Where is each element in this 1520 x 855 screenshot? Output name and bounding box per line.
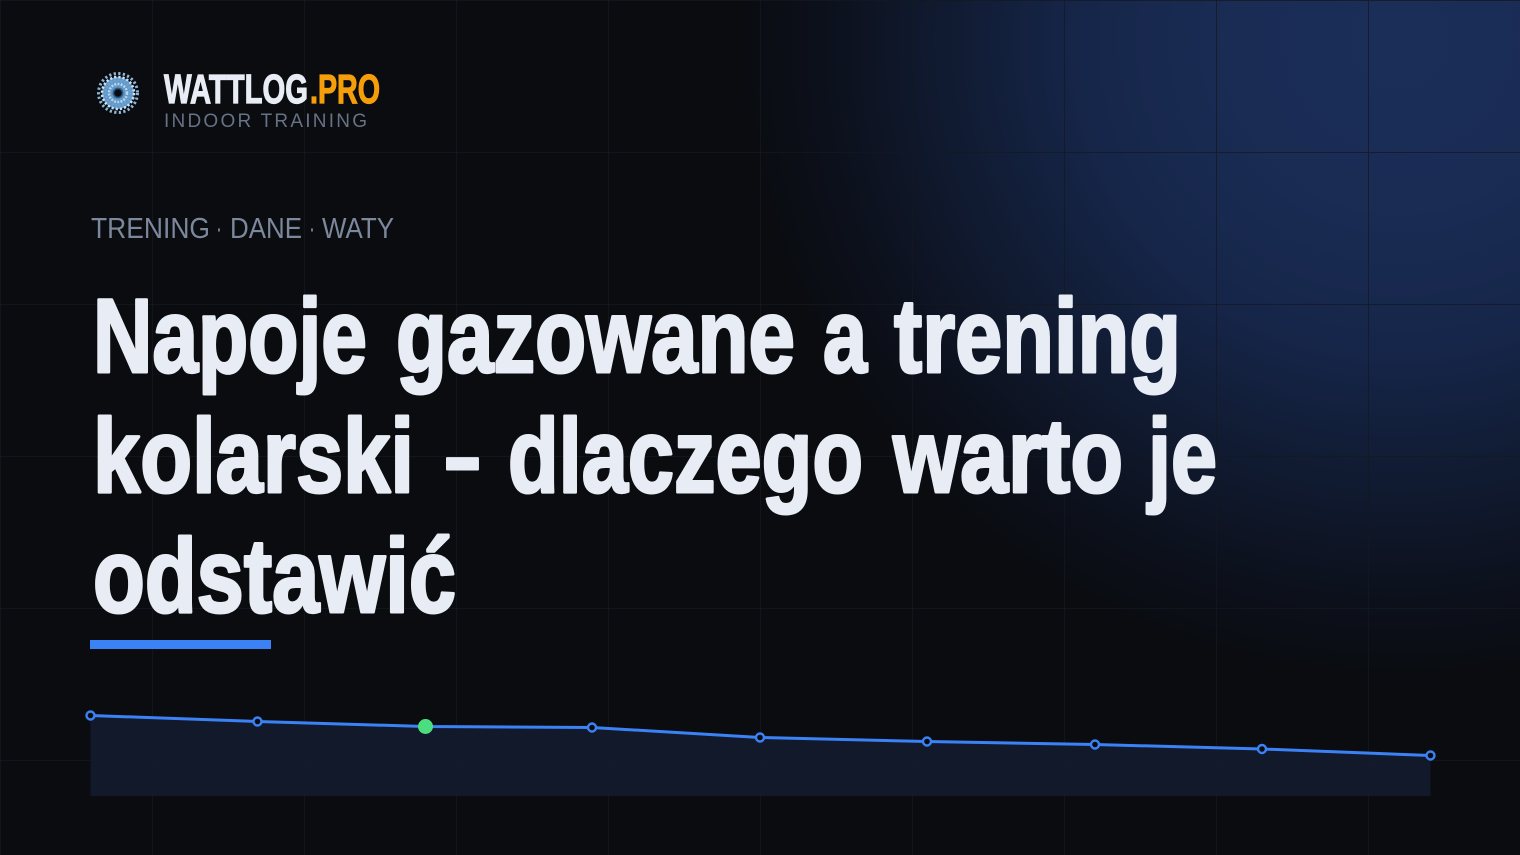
eyebrow: WATY bbox=[322, 213, 394, 245]
title: odstawić bbox=[93, 518, 456, 635]
eyebrow: · bbox=[216, 213, 222, 245]
logo wordmark: WATTLOG bbox=[164, 66, 308, 112]
title bbox=[93, 278, 1217, 635]
eyebrow: DANE bbox=[230, 213, 302, 245]
logo tagline: INDOOR TRAINING bbox=[164, 111, 367, 132]
eyebrow bbox=[91, 213, 394, 245]
chart line bbox=[90, 716, 1430, 756]
title: a bbox=[823, 278, 868, 395]
eyebrow: TRENING bbox=[91, 213, 210, 245]
title: dlaczego bbox=[508, 398, 863, 515]
highlighted marker bbox=[418, 719, 433, 734]
eyebrow: · bbox=[309, 213, 315, 245]
chart markers bbox=[86, 712, 1434, 760]
chart area bbox=[90, 716, 1430, 796]
title: kolarski bbox=[93, 398, 414, 515]
title: – bbox=[445, 398, 480, 515]
title: gazowane bbox=[396, 278, 795, 395]
title: warto bbox=[892, 398, 1123, 515]
logo wordmark: .PRO bbox=[310, 66, 380, 112]
title: je bbox=[1146, 398, 1217, 515]
title: Napoje bbox=[93, 278, 367, 395]
line chart bbox=[86, 712, 1434, 796]
title accent bar bbox=[90, 640, 271, 649]
title: trening bbox=[894, 278, 1181, 395]
icon: bike cassette logo bbox=[98, 74, 138, 112]
